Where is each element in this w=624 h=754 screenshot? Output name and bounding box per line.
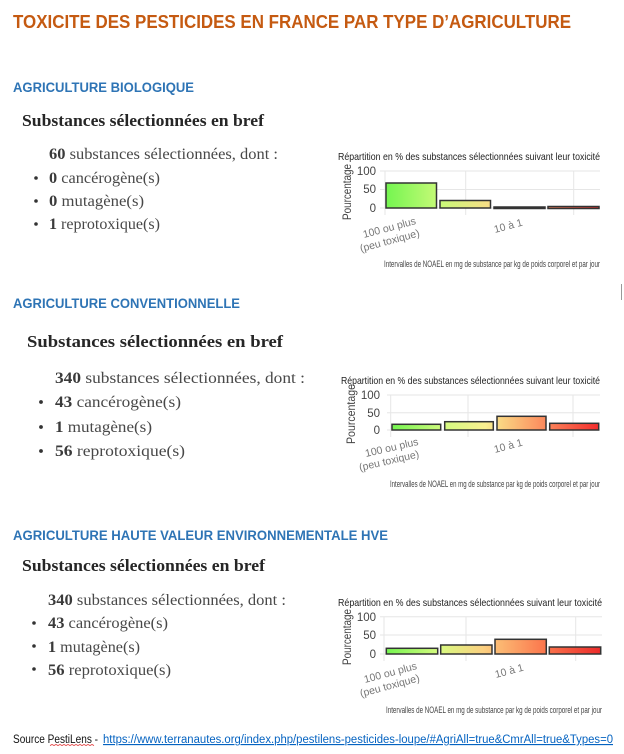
heading: agriculture biologique: AGRICULTURE BIOLOGIQUE <box>13 80 194 95</box>
panel: agriculture HVE <box>13 528 602 715</box>
source footer: https://www.terranautes.org/index.php/pestilens-pesticides-loupe/#AgriAll=true&CmrAll=true&Types=0 <box>103 734 613 746</box>
bar chart: toxicity distribution, conventional: Pourcentage <box>344 384 358 444</box>
text block: substance counts: 0 mutagène(s) <box>49 193 144 210</box>
bar chart: toxicity distribution, HVE: 100 <box>357 612 376 624</box>
bar chart: toxicity distribution, HVE: 50 <box>363 630 376 642</box>
heading: agriculture haute valeur environnementale: AGRICULTURE HAUTE VALEUR ENVIRONNEMENTALE HVE <box>13 528 388 543</box>
text block: substance counts: 56 reprotoxique(s) <box>55 443 185 460</box>
text block: substance counts: 56 reprotoxique(s) <box>48 662 171 679</box>
bar chart: toxicity distribution, organic: 100 ou plus <box>362 215 417 241</box>
source footer: Source PestiLens - <box>13 734 98 746</box>
bar chart: toxicity distribution, organic <box>338 151 600 269</box>
bar chart: toxicity distribution, organic: 10 à 1 <box>493 217 524 236</box>
panel: agriculture biologique <box>13 80 600 269</box>
bar chart: toxicity distribution, HVE <box>338 597 602 715</box>
text block: substance counts: 43 cancérogène(s) <box>55 394 181 411</box>
text block: substance counts: 340 substances sélectionnées, dont : <box>55 370 305 387</box>
bar chart: toxicity distribution, HVE: 0 <box>370 649 376 661</box>
bar chart: toxicity distribution, organic: Pourcentage <box>340 164 354 220</box>
text block: substance counts: 1 mutagène(s) <box>48 639 140 656</box>
text block: substance counts <box>34 146 278 233</box>
text block: substance counts: 0 cancérogène(s) <box>49 170 160 187</box>
bar chart: toxicity distribution, organic: (peu toxique) <box>359 227 421 255</box>
bar chart: toxicity distribution, HVE: (peu toxique) <box>359 672 421 700</box>
resize handle mark <box>620 284 623 300</box>
bar chart: toxicity distribution, HVE: 10 à 1 <box>494 662 525 681</box>
subheading: Substances sélectionnées en bref <box>22 111 264 130</box>
bar chart: toxicity distribution, organic: 0 <box>370 203 376 215</box>
bar chart: toxicity distribution, organic: 100 <box>357 166 376 178</box>
text block: substance counts: 1 reprotoxique(s) <box>49 216 160 233</box>
bar chart: toxicity distribution, HVE: Pourcentage <box>340 609 354 665</box>
subheading: Substances sélectionnées en bref <box>22 556 265 575</box>
title: TOXICITE DES PESTICIDES EN FRANCE PAR TYPE D’AGRICULTURE <box>13 12 571 32</box>
bar chart: toxicity distribution, conventional: 100 ou plus <box>364 436 420 460</box>
subheading: Substances sélectionnées en bref <box>27 332 283 351</box>
text block: substance counts: 1 mutagène(s) <box>55 419 152 436</box>
bar chart: toxicity distribution, conventional: (peu toxique) <box>358 448 420 474</box>
bar chart: toxicity distribution, conventional: 0 <box>374 425 380 437</box>
bar chart: toxicity distribution, conventional: 50 <box>367 408 380 420</box>
bar chart: toxicity distribution, conventional: 100 <box>361 390 380 402</box>
bar chart: toxicity distribution, HVE: 100 ou plus <box>363 660 418 686</box>
text block: substance counts <box>39 370 305 460</box>
text block: substance counts: 340 substances sélectionnées, dont : <box>48 592 286 609</box>
panel: agriculture conventionnelle <box>13 296 600 489</box>
bar chart: toxicity distribution, organic: 50 <box>363 184 376 196</box>
text block: substance counts: 43 cancérogène(s) <box>48 615 168 632</box>
text block: substance counts: 60 substances sélectionnées, dont : <box>49 146 278 163</box>
heading: agriculture conventionnelle: AGRICULTURE CONVENTIONNELLE <box>13 296 240 311</box>
bar chart: toxicity distribution, conventional: 10 à 1 <box>493 437 524 456</box>
bar chart: toxicity distribution, conventional <box>341 375 600 489</box>
text block: substance counts <box>32 592 286 679</box>
